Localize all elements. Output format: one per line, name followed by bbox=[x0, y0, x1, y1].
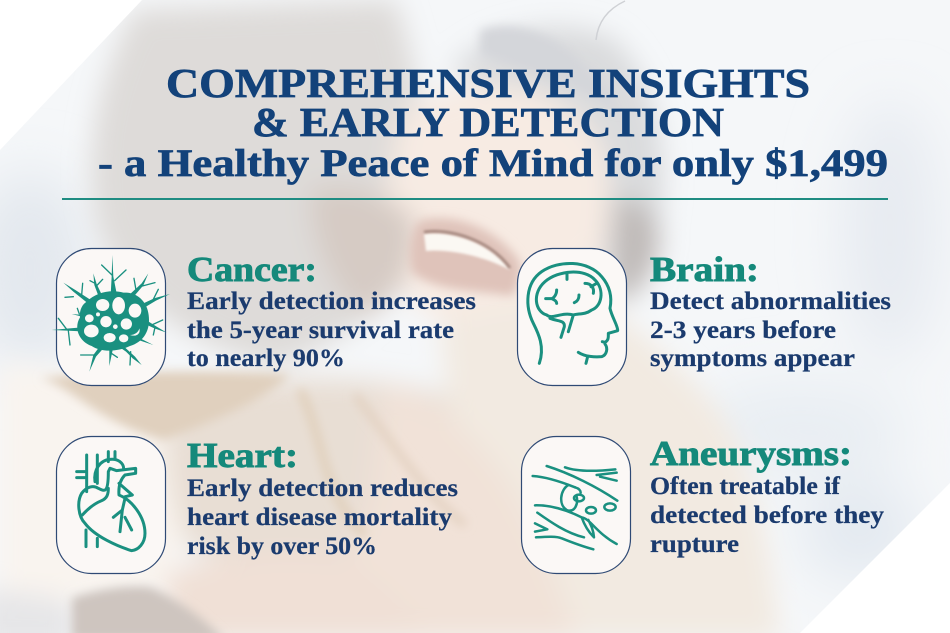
text: cancer: the 5-year survival rate bbox=[187, 317, 454, 344]
text: brain bbox=[650, 288, 891, 372]
panel: cancer bbox=[52, 248, 476, 386]
icon: cancer cell bbox=[52, 248, 170, 386]
title bbox=[98, 60, 888, 185]
text: heart bbox=[187, 475, 458, 560]
text: aneurysms: detected before they bbox=[650, 502, 885, 529]
text: brain: symptoms appear bbox=[650, 345, 855, 372]
heading: heart: Heart: bbox=[187, 436, 298, 475]
title: - a Healthy Peace of Mind for only $1,499 bbox=[98, 142, 888, 185]
text: aneurysms: rupture bbox=[650, 531, 739, 558]
text: aneurysms: Often treatable if bbox=[650, 473, 841, 500]
white diagonal corners bbox=[0, 0, 142, 150]
title: COMPREHENSIVE INSIGHTS bbox=[166, 60, 810, 106]
heading: cancer: Cancer: bbox=[187, 250, 317, 289]
text: cancer: Early detection increases bbox=[187, 288, 476, 315]
text: heart: Early detection reduces bbox=[187, 475, 458, 502]
text: heart: heart disease mortality bbox=[187, 504, 453, 531]
text: cancer bbox=[187, 288, 476, 372]
icon: brain in head bbox=[518, 248, 626, 386]
text: brain: 2-3 years before bbox=[650, 317, 836, 344]
text: aneurysms bbox=[650, 473, 885, 558]
panel: brain bbox=[518, 248, 891, 386]
text: cancer: to nearly 90% bbox=[187, 345, 345, 372]
icon: anatomical heart bbox=[56, 436, 166, 574]
panel: aneurysms bbox=[522, 434, 885, 574]
title: & EARLY DETECTION bbox=[252, 99, 724, 145]
text: brain: Detect abnormalities bbox=[650, 288, 891, 315]
text: heart: risk by over 50% bbox=[187, 533, 377, 560]
icon: ruptured blood vessel bbox=[522, 436, 630, 574]
heading: aneurysms: Aneurysms: bbox=[650, 434, 852, 473]
panel: heart bbox=[56, 436, 458, 574]
heading: brain: Brain: bbox=[650, 250, 759, 289]
